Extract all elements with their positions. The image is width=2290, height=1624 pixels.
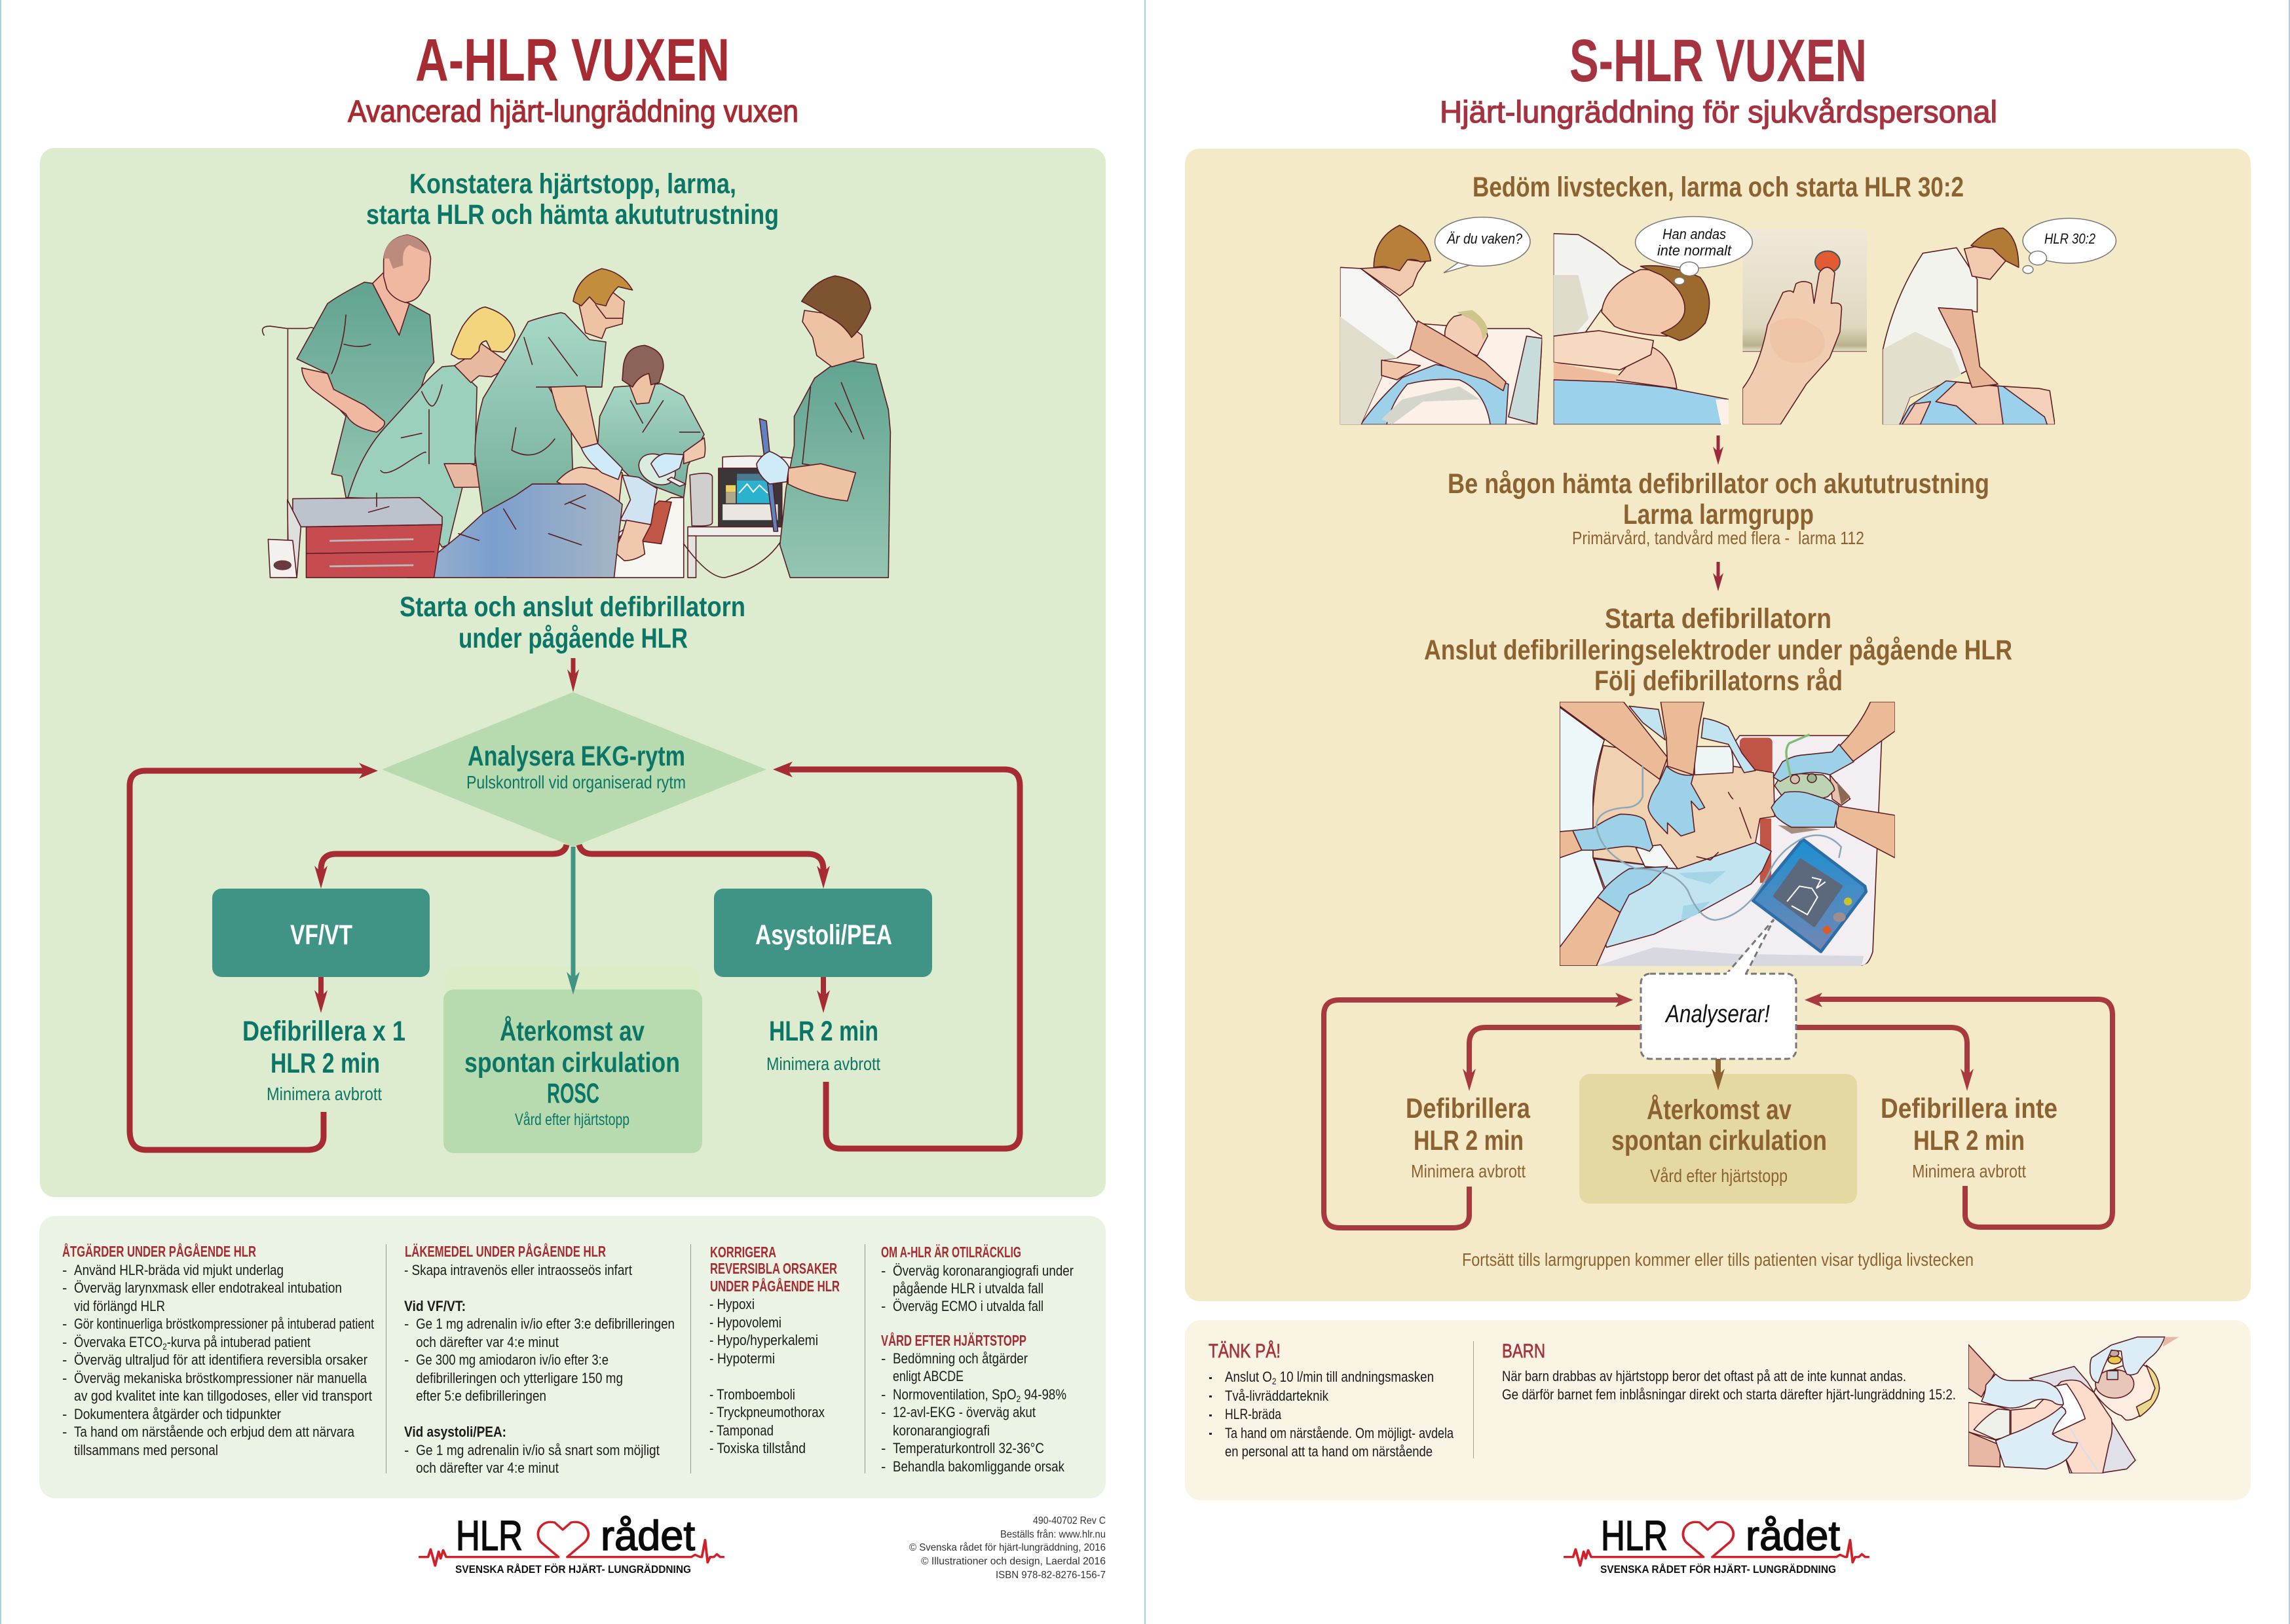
arrow: right loop back [773,762,1020,1149]
box: ROSC: spontan cirkulation [464,1047,680,1079]
column: läkemedel: - [404,1352,409,1368]
column: reversibla orsaker: - Tryckpneumothorax [709,1404,825,1420]
text: HLR 2 min: Minimera avbrott [766,1054,880,1074]
decision: analysera EKG-rytm: Analysera EKG-rytm [468,741,685,772]
text: imprint: © Illustrationer och design, Laerdal 2016 [921,1556,1106,1567]
column: om A-HLR är otillräcklig [881,1244,1074,1475]
column: tänk på: en personal att ta hand om närstående [1225,1443,1433,1460]
column: läkemedel: efter 5:e defibrilleringen [416,1388,546,1404]
logo: HLR rådet left: SVENSKA RÅDET FÖR HJÄRT- LUNGRÄDDNING [455,1563,691,1576]
text: defibrillera inte: Defibrillera inte [1881,1093,2057,1124]
subtitle: S-HLR: Hjärt-lungräddning för sjukvårdspersonal [1440,94,1997,129]
column: åtgärder: - [62,1424,67,1440]
logo: HLR rådet right: SVENSKA RÅDET FÖR HJÄRT- LUNGRÄDDNING [1600,1563,1836,1576]
column: om A-HLR är otillräcklig: - [881,1458,886,1475]
column: läkemedel: defibrilleringen och ytterligare 150 mg [416,1370,623,1386]
heading: konstatera hjärtstopp: Konstatera hjärtstopp, larma, [409,168,736,200]
heading: starta och anslut: under pågående HLR [459,623,688,654]
text: defibrillera x 1: HLR 2 min [271,1048,380,1079]
column: läkemedel: och därefter var 4:e minut [416,1460,559,1476]
column: läkemedel: - [404,1442,409,1458]
title: A-HLR VUXEN: A-HLR VUXEN [415,27,730,94]
column: åtgärder: - [62,1334,67,1350]
text: imprint: ISBN 978-82-8276-156-7 [996,1570,1106,1581]
arrow: loop left [1324,993,1633,1228]
text: defibrillera inte: HLR 2 min [1913,1125,2025,1156]
column: åtgärder: Övervaka ETCO [74,1334,179,1350]
column: läkemedel: - Skapa intravenös eller intraosseös infart [404,1262,632,1278]
logo: HLR rådet right: rådet [1746,1512,1840,1559]
column: om A-HLR är otillräcklig: - [881,1350,886,1367]
illustration: resuscitation team [263,235,890,578]
column: läkemedel: och därefter var 4:e minut [416,1334,559,1350]
column: barn: När barn drabbas av hjärtstopp beror det oftast på att de inte kunnat andas. [1502,1368,1906,1384]
column: om A-HLR är otillräcklig: - [881,1298,886,1314]
text: defibrillera inte [1881,1093,2057,1181]
column: om A-HLR är otillräcklig: VÅRD EFTER HJÄRTSTOPP [881,1331,1026,1349]
column: tänk på: Två-livräddarteknik [1225,1388,1329,1404]
speech: han andas inte normalt: Han andas [1662,226,1726,242]
column: tänk på: Ta hand om närstående. Om möjligt- avdela [1225,1425,1454,1441]
column: åtgärder: - [62,1406,67,1422]
text: defibrillera x 1: Minimera avbrott [267,1084,382,1104]
column: åtgärder: 2 [162,1341,167,1352]
arrow: to defibrillator [1713,435,1723,465]
text: imprint: 490-40702 Rev C [1033,1515,1106,1526]
box: ROSC: Återkomst av [500,1016,645,1047]
column: tänk på: TÄNK PÅ! [1209,1340,1281,1362]
text: fortsätt: Fortsätt tills larmgruppen kommer eller tills patienten visar tydliga livstecken [1462,1249,1974,1270]
subtitle: A-HLR: Avancerad hjärt-lungräddning vuxen [348,94,798,128]
panel: tänk på and barn [1185,1320,2251,1500]
arrow: left loop back [130,763,378,1150]
text: be någon hämta: Primärvård, tandvård med flera - larma 112 [1572,528,1864,548]
column: åtgärder: ÅTGÄRDER UNDER PÅGÅENDE HLR [62,1242,256,1260]
column: åtgärder: - [62,1370,67,1386]
column: tänk på: 10 l/min till andningsmasken [1276,1369,1434,1385]
column: om A-HLR är otillräcklig: 2 [1017,1393,1021,1404]
arrow: loop right [1805,993,2112,1227]
arrow: to VF/VT [314,845,567,889]
logo: HLR rådet left [419,1512,724,1576]
column: reversibla orsaker: - Hypovolemi [709,1314,781,1331]
column: om A-HLR är otillräcklig: Överväg ECMO i utvalda fall [893,1298,1043,1314]
column: reversibla orsaker: UNDER PÅGÅENDE HLR [710,1277,840,1295]
column: läkemedel: LÄKEMEDEL UNDER PÅGÅENDE HLR [405,1242,606,1260]
decision: analysera EKG-rytm: Pulskontroll vid organiserad rytm [466,772,686,792]
speech: är du vaken: Är du vaken? [1446,231,1523,247]
column: läkemedel: - [404,1316,409,1332]
box: ROSC: ROSC [547,1078,599,1109]
column: reversibla orsaker: - Hypo/hyperkalemi [709,1332,818,1348]
text: be någon hämta: Be någon hämta defibrillator och akututrustning [1448,468,1989,500]
column: om A-HLR är otillräcklig: Normoventilation, SpO [893,1386,1038,1403]
column: läkemedel: Ge 1 mg adrenalin iv/io efter 3:e defibrilleringen [416,1316,675,1332]
column: läkemedel [404,1242,675,1476]
column: åtgärder [62,1242,374,1458]
heading: bedöm livstecken: Bedöm livstecken, larma och starta HLR 30:2 [1473,172,1964,203]
column: läkemedel: Vid asystoli/PEA: [404,1424,506,1440]
column: åtgärder: - [62,1262,67,1278]
decision: analysera EKG-rytm [382,692,766,847]
text: starta defibrillatorn: Följ defibrillatorns råd [1594,665,1843,697]
text: imprint [909,1515,1106,1581]
column: om A-HLR är otillräcklig: - [881,1263,886,1279]
column: åtgärder: Överväg mekaniska bröstkompressioner när manuella [74,1370,367,1386]
box: återkomst av spontan cirkulation: Återkomst av [1647,1094,1792,1126]
text: HLR 2 min: HLR 2 min [769,1016,878,1047]
column: åtgärder: Ta hand om närstående och erbjud dem att närvara [74,1424,355,1440]
column: åtgärder: -kurva på intuberad patient [167,1334,310,1350]
column: om A-HLR är otillräcklig: - [881,1404,886,1420]
text: be någon hämta: Larma larmgrupp [1623,499,1814,530]
text: defibrillera: HLR 2 min [1414,1125,1524,1156]
column: åtgärder: Överväg ultraljud för att identifiera reversibla orsaker [74,1352,367,1368]
column: tänk på: 2 [1272,1376,1277,1386]
column: reversibla orsaker: - Tamponad [709,1422,774,1439]
column: åtgärder: Överväg larynxmask eller endotrakeal intubation [74,1280,342,1296]
column: reversibla orsaker [709,1244,840,1456]
box: återkomst av spontan cirkulation [1579,1074,1857,1204]
column: om A-HLR är otillräcklig: 12-avl-EKG - överväg akut [893,1404,1036,1420]
speech: han andas inte normalt [1657,226,1732,259]
arrow: to analysis [567,658,579,692]
column: om A-HLR är otillräcklig: Bedömning och åtgärder [893,1350,1028,1367]
box: Asystoli/PEA [714,889,932,977]
arrow: to start [1713,562,1723,591]
column: åtgärder: - [62,1280,67,1296]
column: om A-HLR är otillräcklig: koronarangiografi [893,1422,990,1439]
arrow: VF/VT down [314,977,328,1013]
heading: starta och anslut [400,591,745,654]
logo: HLR rådet right [1564,1512,1869,1576]
callout: analyserar [1641,919,1796,1059]
arrow: to defibrillera [1463,1027,1641,1091]
heading: konstatera hjärtstopp: starta HLR och hämta akututrustning [366,199,779,231]
box: återkomst av spontan cirkulation: spontan cirkulation [1611,1125,1827,1156]
column: om A-HLR är otillräcklig: Temperaturkontroll 32-36°C [893,1440,1044,1456]
column: åtgärder: Gör kontinuerliga bröstkompressioner på intuberad patient [74,1316,374,1332]
text: defibrillera: Defibrillera [1406,1093,1531,1124]
box: Asystoli/PEA: Asystoli/PEA [755,919,892,951]
text: be någon hämta [1448,468,1989,548]
box: ROSC: Vård efter hjärtstopp [515,1111,629,1129]
text: imprint: © Svenska rådet för hjärt-lungräddning, 2016 [909,1541,1106,1553]
box: VF/VT [212,889,430,977]
column: läkemedel: Ge 300 mg amiodaron iv/io efter 3:e [416,1352,609,1368]
column: om A-HLR är otillräcklig: - [881,1440,886,1456]
illustration: child CPR [1968,1337,2179,1473]
column: om A-HLR är otillräcklig: enligt ABCDE [893,1368,964,1384]
arrow: to återkomst [1712,1059,1725,1090]
box: återkomst av spontan cirkulation: Vård efter hjärtstopp [1650,1166,1788,1186]
column: åtgärder: Använd HLR-bräda vid mjukt underlag [74,1262,284,1278]
column: åtgärder: - [62,1352,67,1368]
panel: S-HLR flowchart [1185,149,2251,1301]
text: starta defibrillatorn: Anslut defibrilleringselektroder under pågående HLR [1424,635,2012,666]
text: defibrillera inte: Minimera avbrott [1912,1161,2026,1181]
illustration: team with AED [1560,702,1895,966]
panel: A-HLR details [39,1216,1106,1498]
box: ROSC [443,989,702,1153]
text: imprint: Beställs från: www.hlr.nu [1000,1528,1106,1540]
text: defibrillera x 1: Defibrillera x 1 [242,1016,405,1047]
arrow: Asystoli down [817,977,830,1013]
heading: starta och anslut: Starta och anslut defibrillatorn [400,591,745,623]
column: åtgärder: Dokumentera åtgärder och tidpunkter [74,1406,281,1422]
text: starta defibrillatorn [1424,603,2012,697]
text: HLR 2 min [766,1016,880,1074]
heading: konstatera hjärtstopp [366,168,779,231]
column: åtgärder: - [62,1316,67,1332]
logo: HLR rådet left: HLR [456,1512,523,1559]
column: reversibla orsaker: - Hypoxi [709,1296,755,1312]
column: reversibla orsaker: - Toxiska tillstånd [709,1440,806,1456]
column: om A-HLR är otillräcklig: 94-98% [1021,1386,1066,1403]
text: starta defibrillatorn: Starta defibrillatorn [1605,603,1831,635]
arrow: to ROSC [567,847,580,995]
logo: HLR rådet left: rådet [601,1512,695,1559]
column: åtgärder: tillsammans med personal [74,1442,218,1458]
column: reversibla orsaker: - Hypotermi [709,1350,775,1367]
text: defibrillera: Minimera avbrott [1411,1161,1526,1181]
column: läkemedel: Vid VF/VT: [404,1298,466,1314]
column: om A-HLR är otillräcklig: - [881,1386,886,1403]
column: om A-HLR är otillräcklig: Behandla bakomliggande orsak [893,1458,1065,1475]
column: reversibla orsaker: REVERSIBLA ORSAKER [710,1260,837,1277]
logo: HLR rådet right: HLR [1601,1512,1668,1559]
column: om A-HLR är otillräcklig: OM A-HLR ÄR OTILRÄCKLIG [881,1244,1021,1261]
text: defibrillera x 1 [242,1016,405,1104]
column: barn: BARN [1502,1340,1545,1362]
column: barn: Ge därför barnet fem inblåsningar direkt och starta därefter hjärt-lungräddning 15:2. [1502,1386,1956,1403]
column: läkemedel: Ge 1 mg adrenalin iv/io så snart som möjligt [416,1442,660,1458]
column: tänk på: HLR-bräda [1225,1406,1282,1422]
column: reversibla orsaker: KORRIGERA [710,1244,776,1261]
column: om A-HLR är otillräcklig: pågående HLR i utvalda fall [893,1280,1043,1297]
callout: analyserar: Analyserar! [1664,1001,1770,1028]
title: S-HLR VUXEN: S-HLR VUXEN [1569,28,1867,94]
box: VF/VT: VF/VT [290,919,352,951]
column: om A-HLR är otillräcklig: Överväg koronarangiografi under [893,1263,1074,1279]
arrow: to Asystoli/PEA [579,845,830,889]
speech: han andas inte normalt: inte normalt [1657,242,1732,259]
column: tänk på: Anslut O [1225,1369,1280,1385]
panel: A-HLR flowchart [40,148,1106,1197]
arrow: to defibrillera inte [1796,1027,1974,1091]
text: defibrillera [1406,1093,1531,1181]
column: åtgärder: av god kvalitet inte kan tillgodoses, eller vid transport [74,1388,372,1404]
column: reversibla orsaker: - Tromboemboli [709,1386,795,1403]
column: åtgärder: vid förlängd HLR [74,1298,165,1314]
speech: HLR 30:2: HLR 30:2 [2044,231,2095,247]
column: tänk på [1209,1340,1454,1460]
column: barn [1502,1340,1956,1403]
illustrations: assessment sequence [1340,217,2116,424]
